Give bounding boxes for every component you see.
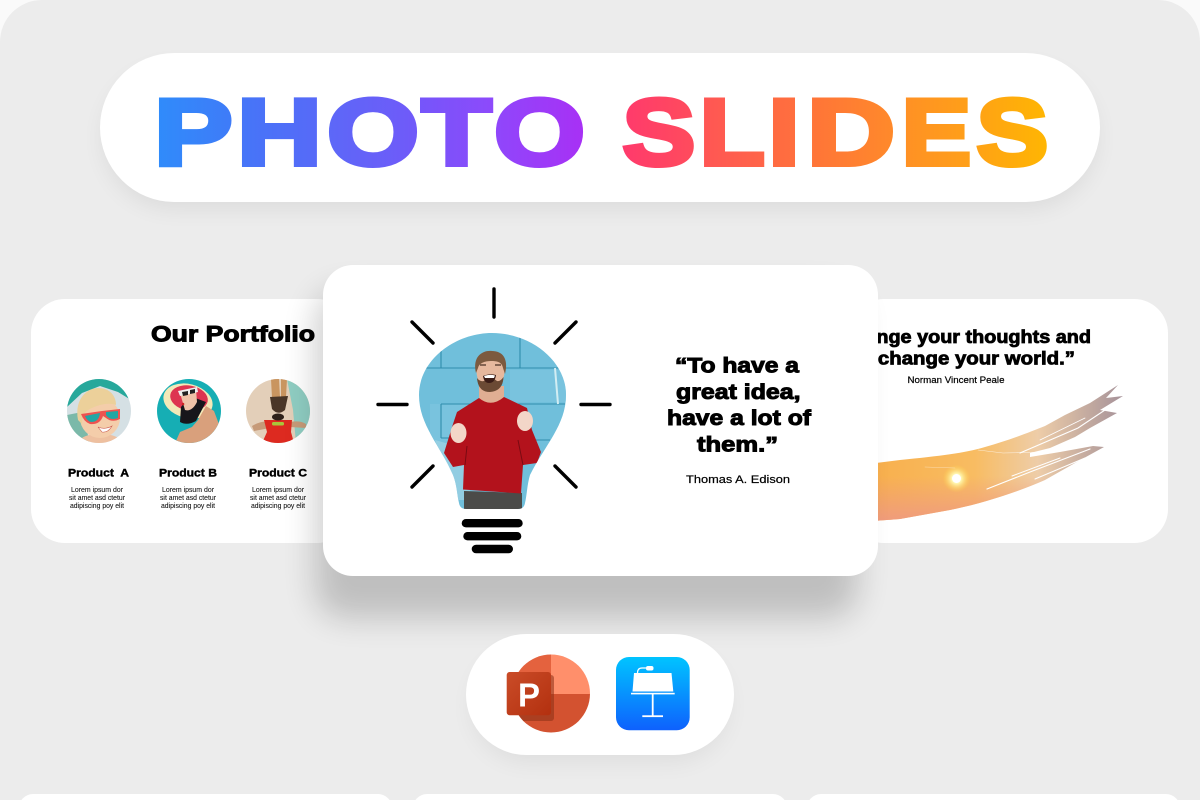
labels: Product C: Product C: [249, 468, 307, 480]
labels: Product B: Lorem ipsum dor: [162, 485, 215, 494]
icon: bulb base bars: [462, 519, 523, 553]
icon: Keynote: [616, 657, 690, 730]
labels: Product C: sit amet asd ctetur: [250, 493, 307, 502]
head: [476, 361, 504, 382]
title: PHOTO SLIDES: S: [977, 81, 1048, 185]
neck: [479, 386, 504, 403]
quote text right: Norman Vincent Peale: [908, 375, 1004, 385]
icon: light rays: [378, 289, 610, 487]
labels: Product A: [68, 468, 129, 510]
title: PHOTO SLIDES: E: [902, 79, 971, 184]
photo: child with sunglasses: [67, 379, 131, 448]
panel: portfolio slide: [31, 299, 351, 543]
bottom card row: [19, 794, 1180, 800]
quote text center: have a lot of: [667, 406, 812, 430]
title: PHOTO SLIDES: O: [494, 80, 585, 185]
quote text right: “Change your thoughts and: [829, 327, 1091, 347]
title: PHOTO SLIDES: S: [623, 79, 695, 185]
heading: Our Portfolio: Our Portfolio: [151, 322, 315, 346]
title pill: [100, 53, 1100, 208]
fists: [450, 423, 466, 443]
title: PHOTO SLIDES: T: [422, 80, 491, 185]
pants: [464, 491, 522, 509]
sunset brush stroke: [860, 385, 1123, 522]
labels: Product B: Product B: [159, 468, 217, 480]
panel: main lightbulb slide: [323, 265, 878, 576]
app icon pill: [466, 634, 734, 762]
labels: Product B: [159, 468, 217, 510]
quote text right: [829, 327, 1091, 385]
title: PHOTO SLIDES: I: [768, 80, 800, 185]
photo: woman on poolside: [246, 379, 310, 443]
title: PHOTO SLIDES: P: [154, 80, 232, 185]
icon: PowerPoint: P: [518, 676, 540, 714]
labels: Product C: [249, 468, 307, 510]
photo: woman in red hat: [157, 378, 221, 443]
panel: quote slide right: [829, 299, 1168, 543]
title: PHOTO SLIDES: D: [807, 81, 895, 185]
labels: Product A: Product A: [68, 468, 129, 480]
quote text center: [667, 354, 812, 456]
quote text right: you change your world.”: [836, 348, 1075, 368]
labels: Product A: Lorem ipsum dor: [71, 485, 124, 494]
labels: Product A: sit amet asd ctetur: [69, 493, 126, 502]
labels: Product A: adipiscing poy elit: [70, 501, 124, 510]
icon: PowerPoint: [507, 654, 592, 734]
labels: Product B: adipiscing poy elit: [161, 501, 215, 510]
author: Thomas A. Edison: Thomas A. Edison: [686, 474, 790, 486]
center card shadow: [315, 290, 858, 618]
labels: Product B: sit amet asd ctetur: [160, 493, 217, 502]
quote text center: them.”: [697, 432, 778, 456]
title: PHOTO SLIDES: L: [700, 80, 765, 185]
title: PHOTO SLIDES: [154, 79, 1048, 185]
title: PHOTO SLIDES: H: [237, 80, 322, 185]
quote text center: “To have a: [675, 354, 800, 378]
labels: Product C: adipiscing poy elit: [251, 501, 305, 510]
photo: man in lightbulb: [415, 330, 570, 512]
sweater: [444, 397, 541, 494]
title: PHOTO SLIDES: O: [327, 80, 419, 185]
quote text center: great idea,: [676, 380, 800, 404]
labels: Product C: Lorem ipsum dor: [252, 485, 305, 494]
